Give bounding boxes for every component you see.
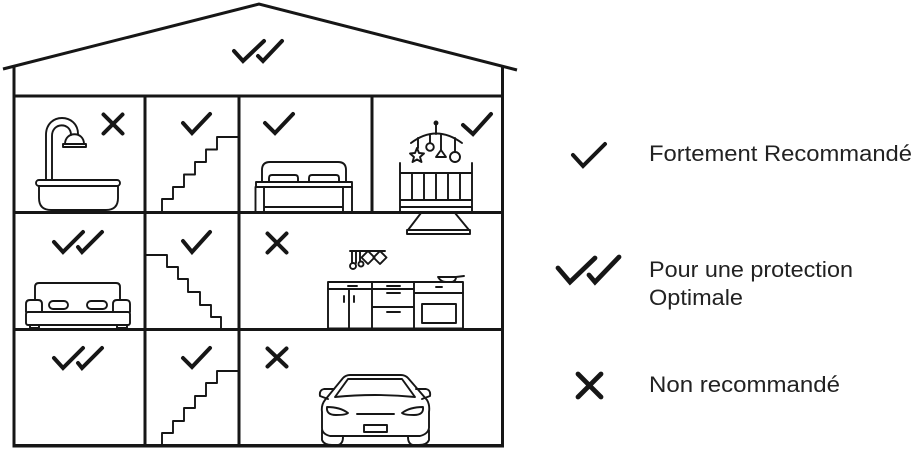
- cross mark: [268, 348, 286, 366]
- cross mark: [268, 234, 286, 252]
- room: kitchen: [268, 213, 470, 328]
- room: middle staircase: [146, 232, 221, 328]
- double check mark: [54, 232, 102, 252]
- icon: bathtub with shower: [36, 118, 120, 210]
- label: Fortement Recommandé: [649, 141, 912, 166]
- room dividers: [145, 96, 372, 446]
- icon: crib with mobile: [400, 122, 472, 211]
- legend item: optimal protection: [558, 257, 853, 282]
- icon: kitchen cabinets and oven: [328, 276, 464, 328]
- room: lower staircase: [162, 348, 238, 444]
- label: Non recommandé: [649, 372, 840, 397]
- icon: check mark: [573, 144, 605, 166]
- legend item: strongly recommended: [573, 141, 912, 166]
- icon: car: [320, 375, 430, 445]
- cross mark: [104, 114, 122, 134]
- roof double check mark: [234, 41, 282, 61]
- label: Pour une protection: [649, 257, 853, 282]
- icon: range hood: [407, 213, 470, 234]
- room: lower left: [54, 348, 102, 368]
- house walls and floors: [13, 66, 504, 446]
- check mark: [183, 114, 210, 133]
- check mark: [265, 114, 293, 133]
- legend: [558, 141, 912, 397]
- icon: cross mark: [578, 374, 601, 397]
- check mark: [183, 348, 210, 367]
- room: nursery: [400, 114, 491, 211]
- roof: [3, 4, 517, 70]
- check mark: [183, 232, 210, 252]
- label continuation: Optimale: [649, 285, 743, 310]
- icon: stairs: [162, 371, 238, 444]
- room: bedroom: [256, 114, 352, 211]
- icon: double check mark: [558, 257, 619, 282]
- check mark: [463, 114, 491, 134]
- icon: sofa: [26, 283, 130, 328]
- icon: stairs: [146, 255, 221, 328]
- room: bathroom: [36, 114, 122, 210]
- room: living room: [26, 232, 130, 328]
- icon: kitchen utensil rack: [350, 251, 386, 269]
- house outline: [3, 4, 517, 446]
- room: upper staircase: [162, 114, 238, 211]
- room: garage: [268, 348, 430, 445]
- icon: bed: [256, 162, 352, 211]
- double check mark: [54, 348, 102, 368]
- legend item: not recommended: [578, 372, 840, 397]
- icon: stairs: [162, 137, 238, 211]
